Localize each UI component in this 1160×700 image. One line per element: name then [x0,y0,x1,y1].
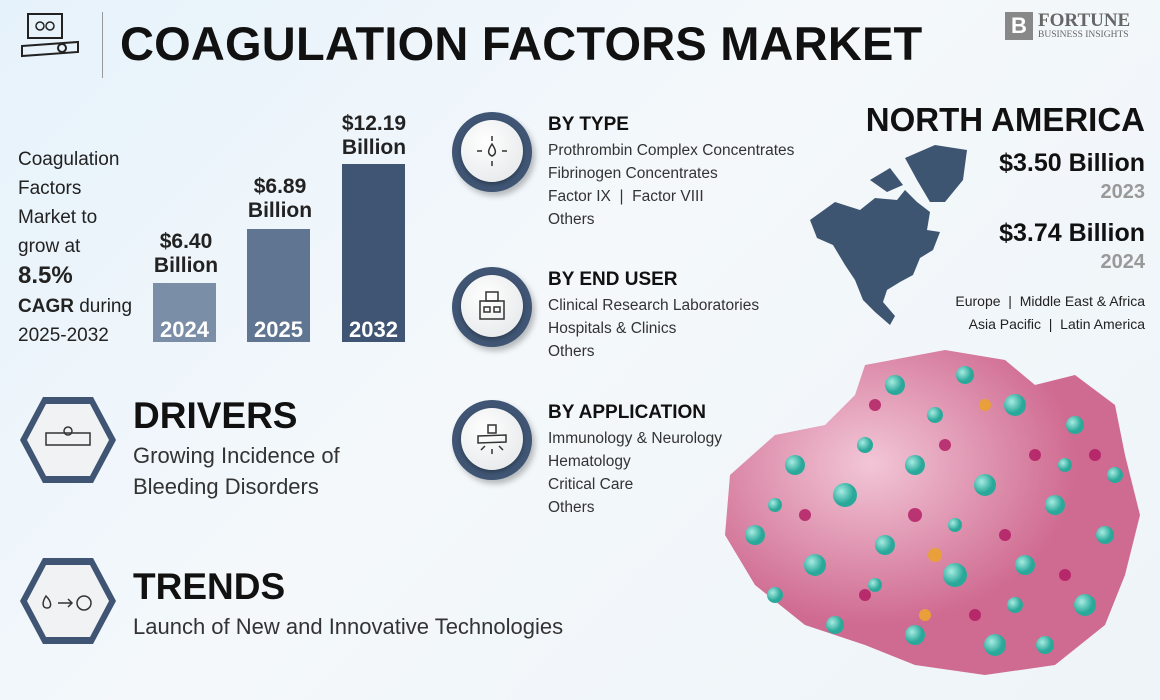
bar chart [153,112,406,342]
region: north america: Asia Pacific | Latin America [969,316,1145,332]
icon: header [21,13,79,58]
region: north america: $3.50 Billion [999,149,1145,177]
drivers: Growing Incidence of [133,443,340,468]
segment: by application: Hematology [548,453,631,470]
segment: by type: Others [548,211,595,228]
region: north america: $3.74 Billion [999,219,1145,247]
bar chart: 2024 [160,317,209,342]
segment: by application: BY APPLICATION [548,402,706,423]
bar chart: $6.89 [254,175,306,198]
segment: by type: Factor IX | Factor VIII [548,188,704,205]
text: CAGR: Coagulation [18,149,119,170]
logo: BUSINESS INSIGHTS [1038,30,1129,40]
segment: by end user: Clinical Research Laboratories [548,297,759,314]
text: CAGR: 8.5% [18,262,73,289]
text: CAGR: CAGR during [18,296,132,317]
trends [20,558,563,644]
drivers: Bleeding Disorders [133,474,319,499]
bar chart: 2025 [254,317,303,342]
segment: by type: BY TYPE [548,114,629,135]
text: CAGR: grow at [18,236,80,257]
region: north america: 2023 [1100,181,1145,203]
molecule illustration [725,350,1140,675]
logo: FORTUNE [1038,10,1130,31]
segment: by end user: Others [548,343,595,360]
text: CAGR: Factors [18,178,81,199]
text: CAGR: 2025-2032 [18,325,109,346]
segment: by application: Others [548,499,595,516]
title: COAGULATION FACTORS MARKET [120,17,922,70]
logo: B [1011,13,1027,38]
segment: by type [452,112,794,228]
trends: TRENDS [133,566,285,607]
segment: by end user: BY END USER [548,269,678,290]
bar chart: $6.40 [160,230,212,253]
region: north america: NORTH AMERICA [866,101,1145,138]
trends: Launch of New and Innovative Technologies [133,614,563,639]
text: CAGR: Market to [18,207,97,228]
segment: by application: Critical Care [548,476,633,493]
drivers: DRIVERS [133,395,297,436]
segment: by end user: Hospitals & Clinics [548,320,676,337]
bar chart: Billion [248,199,312,222]
map: north america [810,145,967,325]
text: CAGR [18,149,132,346]
segment: by application: Immunology & Neurology [548,430,722,447]
bar chart: 2032 [349,317,398,342]
region: north america [866,101,1146,332]
region: north america: 2024 [1100,251,1145,273]
segment: by type: Fibrinogen Concentrates [548,165,718,182]
drivers [20,395,340,499]
bar chart: Billion [154,254,218,277]
segment: by type: Prothrombin Complex Concentrates [548,142,794,159]
bar chart: Billion [342,136,406,159]
segment: by end user [452,267,759,360]
region: north america: Europe | Middle East & Africa [955,293,1145,309]
segment: by application [452,400,722,516]
logo [1005,10,1130,40]
bar chart: $12.19 [342,112,406,135]
